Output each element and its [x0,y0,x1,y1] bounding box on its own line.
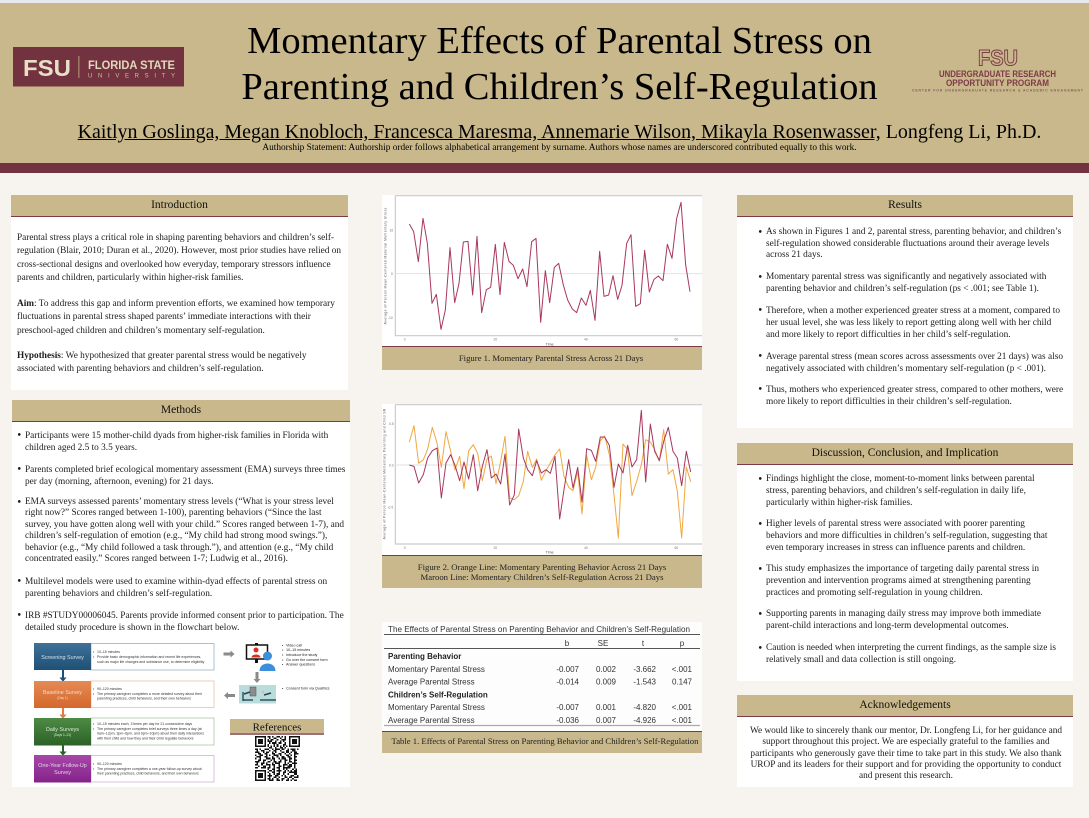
line chart: parenting behavior and self-regulation: Time [546,551,554,555]
QR code [255,736,300,781]
bullet: findings [766,474,1035,509]
bullet: EMA measures: right now?” Scores ranged between 1-100), parenting behaviors (“Since the last [25,508,322,518]
text: video call steps: Video call [286,644,302,648]
top strip [0,0,1089,3]
text: aim: Aim: To address this gap and inform prevention efforts, we examined how temporary [17,299,335,309]
step: one-year follow-up survey: 90–120 minutes [97,762,122,766]
authorship statement: Authorship Statement: Authorship order follows alphabetical arrangement by surname. Authors whose names are underscored contributed equally to this work. [262,143,857,153]
bullet: interpretation: and more likely to report difficulties in her child’s self-regulation. [766,330,1011,340]
title: Momentary Effects of Parental Stress on [247,20,872,62]
caption: table 1: Table 1. Effects of Parental Stress on Parenting Behavior and Children’s Self-Regulation [392,736,698,746]
bullet: prevention: This study emphasizes the importance of targeting daily parental stress in [766,564,1039,574]
text: consent via Qualtrics: • [282,686,284,690]
step: daily surveys: (Days 1–21) [54,733,71,737]
text: video call steps: • [282,644,284,648]
text: acknowledgements [750,726,1062,781]
bullet: between mothers: Thus, mothers who experienced greater stress, compared to other mothers, were [766,385,1063,395]
bullet: higher stress: even temporary increases in stress can influence parents and children. [766,543,1025,553]
text: aim: preschool-aged children and children’s momentary self-regulation. [17,326,265,336]
logo: Undergraduate Research Opportunity Program: CENTER FOR UNDERGRADUATE RESEARCH & ACADEMIC ENGAGEMENT [912,88,1084,92]
table: effects of parental stress: SE [598,639,608,648]
bullet: participants: children aged 2.5 to 3.5 years. [25,443,137,453]
bullet: fluctuations [766,227,1061,262]
flowchart: study procedure [34,643,330,782]
bullet: EMA schedule [25,464,345,488]
logo: FSU Florida State University: FLORIDA STATE [88,60,175,72]
connector arrows [60,670,66,755]
text: acknowledgements: support throughout this project. We are especially grateful to the families and [762,737,1050,747]
text: background [17,233,341,283]
bullet: IRB: detailed study procedure is shown in the flowchart below. [25,623,239,633]
table: effects of parental stress: p [680,639,685,648]
bullet: findings: stress, parenting behaviors, and children’s self-regulation in daily life, [766,486,1026,496]
panel: table 1 [382,622,702,753]
text: acknowledgements: and present this research. [859,771,953,781]
line chart: momentary parental stress: Time [546,342,554,346]
caption: figure 2: Maroon Line: Momentary Children’s Self-Regulation Across 21 Days [421,572,663,582]
table: effects of parental stress: b [565,639,570,648]
step: daily surveys: • [93,727,95,731]
line chart: momentary parental stress: -10 [388,316,393,320]
line chart: parenting behavior and self-regulation: 0 [404,546,406,550]
heading: introduction: Introduction [151,199,208,211]
step: one-year follow-up survey: their parenting practices, child behaviors, and their own behaviors [97,772,199,776]
arrow: to video call [224,650,234,658]
table: effects of parental stress: 0.009 [596,678,617,686]
table: effects of parental stress: 0.002 [596,665,617,674]
text: acknowledgements: We would like to sincerely thank our mentor, Dr. Longfeng Li, for her guidance and [750,726,1062,736]
bullet: caution [766,643,1056,667]
text: background: regulation (Blair, 2010; Duran et al., 2020). However, most prior studies have relied on [17,246,341,256]
step: baseline survey: The primary caregiver completes a more detailed survey about their [97,692,203,696]
line chart: parenting behavior and self-regulation: Average of Person Mean-Centered Momentary Parenting and Child SR [383,408,387,539]
bullet: EMA schedule: Parents completed brief ecological momentary assessment (EMA) surveys three times [25,465,345,475]
step: screening survey [34,643,214,670]
caption: figure 1: Figure 1. Momentary Parental Stress Across 21 Days [459,353,643,363]
step: baseline survey [34,681,214,708]
panel: acknowledgements [737,695,1073,787]
line chart: momentary parental stress [382,195,702,346]
text: hypothesis: Hypothesis: We hypothesized that greater parental stress would be negatively [17,351,307,361]
text: background: Parental stress plays a critical role in shaping parenting behaviors and children’s self- [17,233,334,243]
heading: results: Results [888,199,922,211]
step: screening survey: such as major life changes and substance use, to determine eligibility [97,660,205,664]
text: acknowledgements: UROP and its leaders for their support and for providing the opportunity to conduct [751,760,1061,770]
bullet: momentary association [766,272,1046,295]
table: effects of parental stress: 0.001 [596,703,617,712]
bullet: EMA measures: behavior (e.g., “My child followed a task through.”), and attention (e.g., “My child [25,543,333,553]
step: screening survey: • [93,650,95,654]
heading: results [737,195,1073,217]
step: daily surveys: • [93,722,95,726]
panel: figure 2 [382,404,702,588]
step: daily surveys: Daily Surveys [46,727,79,733]
caption: table 1 [382,731,702,753]
logo: FSU Florida State University [13,47,184,86]
bullet: interpretation [766,305,1060,342]
step: daily surveys: The primary caregiver completes brief surveys three times a day (at [97,727,202,731]
step: baseline survey: 90–120 minutes [97,687,122,691]
bullet: support: parent-child interactions and long-term developmental outcomes. [766,621,1009,631]
table: effects of parental stress: t [642,639,645,648]
step: daily surveys: with their child and how they and their child regulate behaviors [97,736,194,740]
table: effects of parental stress: -4.820 [633,703,657,712]
table: effects of parental stress: <.001 [672,665,693,674]
text: acknowledgements: participants who generously gave their time to take part in this study. We also thank [750,749,1062,759]
step: one-year follow-up survey: Survey [54,770,71,776]
authors: Kaitlyn Goslinga, Megan Knobloch, Francesca Maresma, Annemarie Wilson, Mikayla Rosenwasser, Longfeng Li, Ph.D. [78,121,1041,143]
step: one-year follow-up survey: • [93,767,95,771]
bullet: higher stress: behaviors and more difficulties in children’s self-regulation, suggesting that [766,531,1048,541]
step: one-year follow-up survey [34,755,214,782]
line chart: parenting behavior and self-regulation: 40 [584,546,588,550]
text: video call steps: Introduce the study [286,653,318,657]
table: effects of parental stress: -0.007 [556,703,580,712]
table: effects of parental stress: Parenting Behavior [388,652,461,661]
table: effects of parental stress: Average Parental Stress [388,678,475,686]
heading: discussion [737,443,1073,465]
icon: video call [246,643,276,671]
table: effects of parental stress: -0.007 [556,665,580,674]
heading: methods [12,400,350,422]
table: effects of parental stress: -0.036 [556,716,580,725]
text: background: parents and children, particularly within higher-risk families. [17,273,244,283]
heading: acknowledgements [737,695,1073,717]
text: video call steps: • [282,653,284,657]
text: consent via Qualtrics: Consent form via Qualtrics [286,686,330,690]
bullet: IRB [25,610,344,634]
logo: FSU Florida State University: UNIVERSITY [88,74,175,80]
table: effects of parental stress: Momentary Parental Stress [388,703,485,712]
bullet: higher stress: Higher levels of parental stress were associated with poorer parenting [766,519,1025,529]
table: effects of parental stress: 0.007 [596,716,617,725]
bullet: between mothers: more likely to report difficulties in their children’s self-regulation. [766,397,1012,407]
text: video call steps: Go over the consent form [286,658,328,662]
heading: acknowledgements: Acknowledgements [859,699,951,711]
bullet: prevention: prevention and intervention programs aimed at strengthening parenting [766,576,1031,586]
step: screening survey: Screening Survey [41,655,84,661]
bullet: findings: particularly within higher-risk families. [766,498,912,508]
line chart: momentary parental stress: 0 [404,338,406,342]
references heading [230,719,324,735]
text: background: cross-sectional designs and overlooked how everyday, temporary stressors influence [17,260,331,270]
icon: consent form [239,685,276,704]
caption: figure 2: Figure 2. Orange Line: Momentary Parenting Behavior Across 21 Days [418,562,666,572]
table: effects of parental stress: Momentary Parental Stress [388,665,485,674]
line chart: parenting behavior and self-regulation [382,404,702,555]
text: aim: fluctuations in parental stress shaped parents’ immediate interactions with their [17,312,311,322]
step: screening survey: 10–15 minutes [97,650,120,654]
bullet: EMA measures: survey, you have gotten along well with your child.” Scores ranged between 1-7), and [25,520,344,530]
line chart: parenting behavior and self-regulation: 0.0 [389,463,394,467]
bullet: higher stress [766,519,1048,554]
bullet: multilevel models: parenting behaviors and children’s self-regulation. [25,589,212,599]
heading: discussion: Discussion, Conclusion, and Implication [812,447,998,459]
text: aim [17,299,335,336]
line chart: momentary parental stress: 10 [389,228,393,232]
bullet: average stress: negatively associated with children’s momentary self-regulation (p < .001). [766,364,1046,374]
text: video call steps: • [282,658,284,662]
table: effects of parental stress: -4.926 [633,716,657,725]
title [241,20,878,108]
logo: Undergraduate Research Opportunity Program: OPPORTUNITY PROGRAM [946,78,1049,89]
caption: figure 1 [382,346,702,370]
step: daily surveys: 10–15 minutes each, 3 times per day for 21 consecutive days [97,722,192,726]
table: effects of parental stress: -3.662 [633,665,657,674]
step: baseline survey: (Day 1) [57,696,68,700]
bullet: average stress: Average parental stress (mean scores across assessments over 21 days) was also [766,352,1063,362]
bullet: findings: Findings highlight the close, moment-to-moment links between parental [766,474,1035,484]
step: screening survey: Provide basic demographic information and recent life experiences, [97,655,201,659]
arrow: back to baseline survey [224,692,235,699]
step: baseline survey: parenting practices, child behaviors, and their own behaviors [97,696,191,700]
line chart: momentary parental stress: Average of Person Mean-Centered Maternal Momentary Stress [383,207,387,324]
bullet: interpretation: Therefore, when a mother experienced greater stress at a moment, compared to [766,306,1060,316]
bullet: between mothers [766,384,1063,408]
line chart: momentary parental stress: 60 [674,338,678,342]
step: baseline survey: • [93,692,95,696]
title: Parenting and Children’s Self-Regulation [241,66,878,108]
line chart: momentary parental stress: 40 [584,338,588,342]
line chart: momentary parental stress: 20 [493,338,497,342]
bullet: prevention: practices and promoting self-regulation in young children. [766,588,983,598]
table: effects of parental stress: <.001 [672,703,693,712]
bullet: caution: Caution is needed when interpreting the current findings, as the sample size is [766,643,1056,653]
bullet: participants: Participants were 15 mother-child dyads from higher-risk families in Florida with [25,431,328,441]
text: video call steps: Answer questions [286,662,315,666]
step: screening survey: • [93,655,95,659]
table: effects of parental stress [382,622,702,731]
heading: introduction [11,195,348,217]
panel: methods [12,400,350,787]
panel: discussion [737,443,1073,681]
bullet: support: Supporting parents in managing daily stress may improve both immediate [766,609,1041,619]
bullet: caution: relatively small and data collection is still ongoing. [766,655,956,665]
bullet: average stress [766,351,1063,375]
text: hypothesis [17,351,307,374]
step: baseline survey: • [93,687,95,691]
bullet: EMA measures [25,497,344,565]
heading: methods: Methods [161,404,201,416]
caption: figure 2 [382,555,702,588]
bullet: EMA measures: concentrated easily.” Scores ranged between 1-7; Ludwig et al., 2016). [25,554,288,564]
table: effects of parental stress: Children’s Self-Regulation [388,690,488,700]
references heading: References [253,722,301,734]
bullet: fluctuations: As shown in Figures 1 and 2, parental stress, parenting behavior, and children’s [766,227,1061,237]
arrow: down to consent [254,672,260,683]
panel: introduction [11,195,348,390]
line chart: momentary parental stress: 0 [391,272,393,276]
header banner [0,3,1089,173]
bullet: interpretation: her usual level, she was less likely to report getting along well with her child [766,318,1051,328]
step: one-year follow-up survey: • [93,762,95,766]
bullet: momentary association: parenting behavior and children’s self-regulation (ps < .001; see Table 1). [766,284,1039,294]
panel: figure 1 [382,195,702,370]
bullet: EMA measures: children’s self-regulation of emotion (e.g., “My child had strong mood swings.”), [25,531,327,541]
panel: results [737,195,1073,428]
logo: FSU Florida State University: FSU [23,55,71,81]
bullet: prevention [766,564,1039,599]
logo: Undergraduate Research Opportunity Program [912,47,1084,92]
bullet: multilevel models [25,576,327,600]
bullet: IRB: IRB #STUDY00006045. Parents provide informed consent prior to participation. The [25,611,344,621]
bullet: EMA measures: EMA surveys assessed parents’ momentary stress levels (“What is your stress level [25,497,334,507]
bullet: multilevel models: Multilevel models were used to examine within-dyad effects of parental stress on [25,577,327,587]
table: effects of parental stress: 0.147 [672,678,693,686]
table: effects of parental stress: -0.014 [556,678,580,686]
line chart: parenting behavior and self-regulation: -0.5 [387,505,393,509]
table: effects of parental stress: <.001 [672,716,693,725]
bullet: momentary association: Momentary parental stress was significantly and negatively associated with [766,272,1046,282]
step: one-year follow-up survey: One-Year Follow-Up [38,763,87,769]
bullet: fluctuations: across 21 days. [766,250,823,260]
bullet: participants [25,430,328,454]
line chart: parenting behavior and self-regulation: 20 [493,546,497,550]
step: one-year follow-up survey: The primary caregiver completes a one-year follow-up survey about [97,767,202,771]
step: daily surveys [34,718,214,746]
step: baseline survey: Baseline Survey [43,690,82,696]
text: video call steps: • [282,648,284,652]
text: video call steps: 10–15 minutes [286,648,310,652]
table: effects of parental stress: Average Parental Stress [388,716,475,725]
bullet: EMA schedule: per day (morning, afternoon, evening) for 21 days. [25,477,213,487]
text: hypothesis: associated with parenting behaviors and children’s self-regulation. [17,364,264,374]
table: effects of parental stress: -1.543 [633,678,657,686]
step: daily surveys: 9am–12pm, 3pm–6pm, and 9pm–10pm) about their daily interactions [97,732,204,736]
table: effects of parental stress: The Effects of Parental Stress on Parenting Behavior and Children’s Self-Regulation [388,624,690,634]
text: video call steps: • [282,662,284,666]
bullet: fluctuations: self-regulation showed considerable fluctuations around their average levels [766,238,1049,248]
maroon header rule [0,163,1089,173]
bullet: support [766,609,1041,633]
logo: Undergraduate Research Opportunity Program: UNDERGRADUATE RESEARCH [939,69,1056,80]
line chart: parenting behavior and self-regulation: 0.5 [389,422,394,426]
line chart: parenting behavior and self-regulation: 60 [674,546,678,550]
